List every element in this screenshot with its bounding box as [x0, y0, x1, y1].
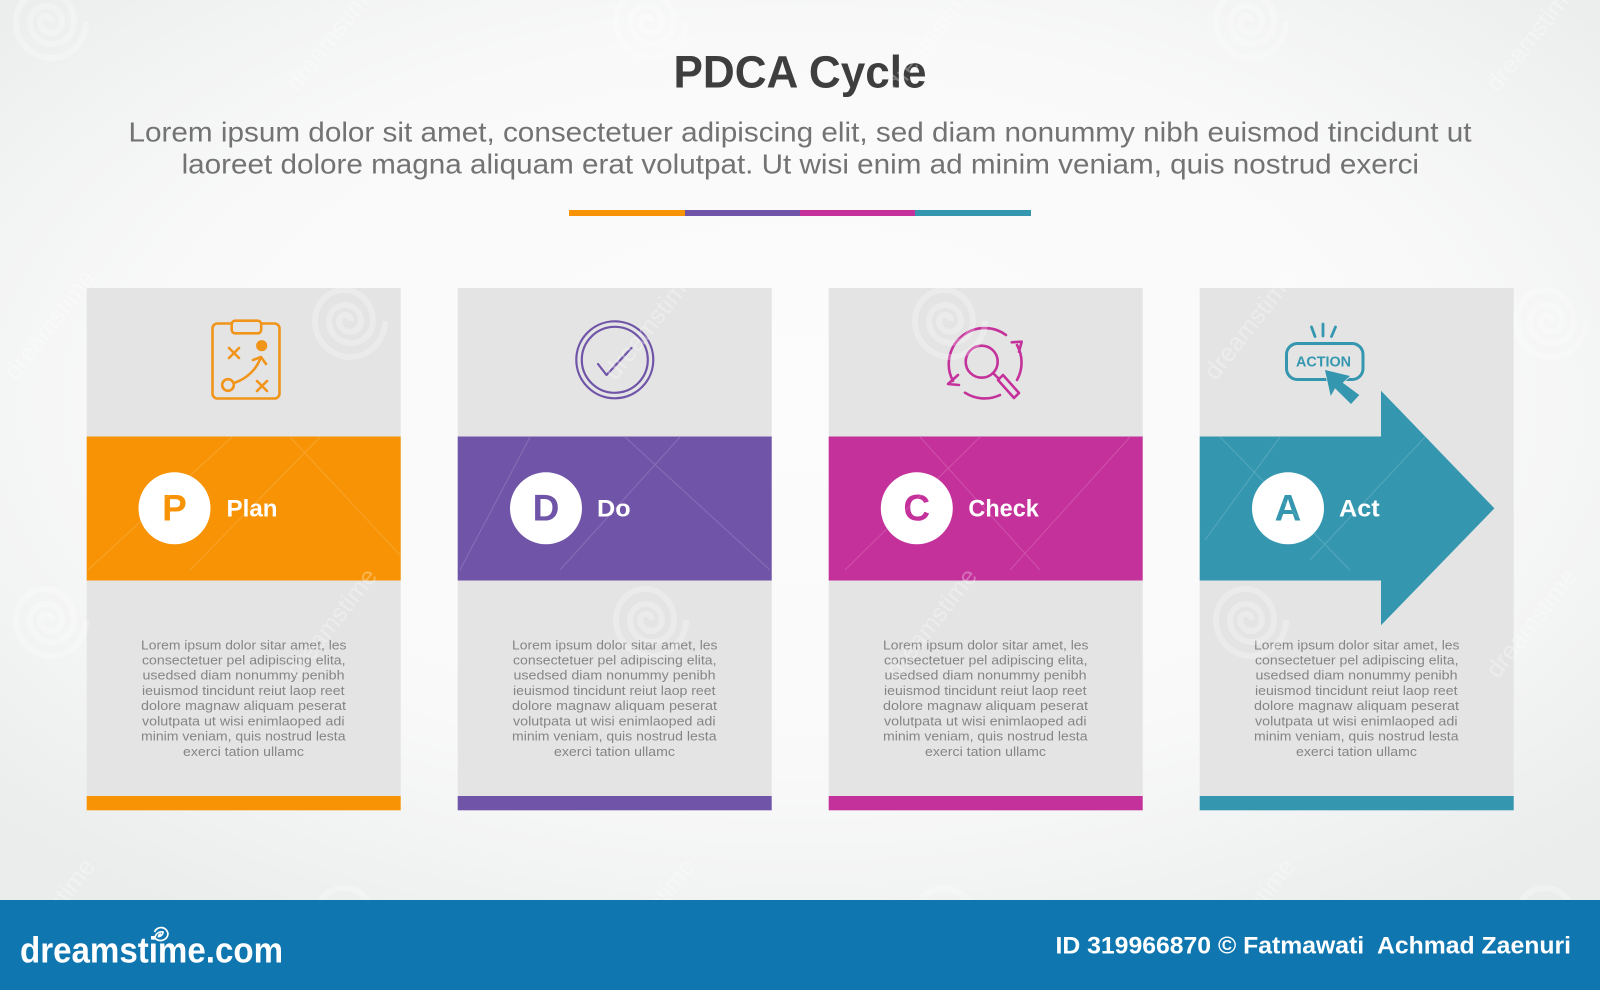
act description: ieuismod tincidunt reiut laop reet [1255, 683, 1458, 698]
plan footer bar [87, 796, 401, 810]
icon: magnifier with cycle arrows [948, 328, 1022, 398]
watermark overlay: dreamstime [598, 853, 701, 973]
check card background [829, 288, 1143, 796]
act footer bar [1200, 796, 1514, 810]
check footer bar [829, 796, 1143, 810]
act description: dolore magnaw aliquam peserat [1254, 698, 1459, 713]
act description: minim veniam, quis nostrud lesta [1254, 729, 1459, 744]
watermark overlay: dreamstime [1480, 563, 1583, 683]
watermark overlay: dreamstime [1198, 853, 1301, 973]
act description [1254, 637, 1460, 759]
panel: Do [458, 288, 772, 810]
plan badge: P [162, 488, 187, 529]
do card background [458, 288, 772, 796]
check description: ieuismod tincidunt reiut laop reet [884, 683, 1087, 698]
subtitle text: Lorem ipsum dolor sit amet, consectetuer adipiscing elit, sed diam nonummy nibh euismod tincidunt ut [128, 117, 1472, 148]
image credit: ID 319966870 © Fatmawati Achmad Zaenuri [1056, 932, 1571, 959]
plan description: minim veniam, quis nostrud lesta [141, 729, 346, 744]
watermark overlay: dreamstime [0, 265, 101, 385]
icon: action button with cursor: ACTION [1296, 355, 1351, 371]
act description: Lorem ipsum dolor sitar amet, les [1254, 637, 1460, 652]
plan description: ieuismod tincidunt reiut laop reet [142, 683, 345, 698]
act badge: A [1275, 488, 1301, 529]
do description: dolore magnaw aliquam peserat [512, 698, 717, 713]
plan description: exerci tation ullamc [183, 744, 305, 759]
do label: Do [597, 496, 631, 523]
plan description [141, 637, 346, 759]
subtitle text: laoreet dolore magna aliquam erat volutpat. Ut wisi enim ad minim veniam, quis nostrud exerci [182, 148, 1419, 179]
plan card background [87, 288, 401, 796]
subtitle text [128, 117, 1472, 179]
watermark overlay: dreamstime [598, 265, 701, 385]
check header band [829, 436, 1143, 580]
panel: Act [1200, 288, 1514, 810]
act badge [1252, 472, 1324, 544]
check label: Check [968, 496, 1039, 523]
plan description: usedsed diam nonummy penibh [142, 668, 344, 683]
check description [883, 637, 1088, 759]
check description: minim veniam, quis nostrud lesta [883, 729, 1088, 744]
plan description: dolore magnaw aliquam peserat [141, 698, 346, 713]
do description [512, 637, 718, 759]
panel: Plan [87, 288, 401, 810]
check description: volutpata ut wisi enimlaoped adi [884, 713, 1086, 728]
act description: consectetuer pel adipiscing elita, [1255, 652, 1458, 668]
icon: action button with cursor [1286, 324, 1363, 404]
do description: Lorem ipsum dolor sitar amet, les [512, 637, 718, 652]
act label: Act [1339, 496, 1380, 523]
do description: ieuismod tincidunt reiut laop reet [513, 683, 716, 698]
do description: minim veniam, quis nostrud lesta [512, 729, 717, 744]
panel: Check [829, 288, 1143, 810]
do footer bar [458, 796, 772, 810]
act card background [1200, 288, 1514, 796]
do description: consectetuer pel adipiscing elita, [513, 652, 716, 668]
plan label: Plan [226, 496, 278, 523]
do badge: D [533, 488, 559, 529]
check description: exerci tation ullamc [925, 744, 1047, 759]
watermark overlay: dreamstime [280, 563, 383, 683]
do description: volutpata ut wisi enimlaoped adi [513, 713, 716, 728]
check description: Lorem ipsum dolor sitar amet, les [883, 637, 1088, 652]
watermark overlay: dreamstime [1198, 265, 1301, 385]
do description: usedsed diam nonummy penibh [514, 668, 716, 683]
do header band [458, 436, 772, 580]
plan badge [138, 472, 210, 544]
act description: usedsed diam nonummy penibh [1256, 668, 1458, 683]
act description: volutpata ut wisi enimlaoped adi [1255, 713, 1458, 728]
plan header band [87, 436, 401, 580]
icon: clipboard strategy [212, 321, 280, 398]
do badge [510, 472, 582, 544]
dreamstime logo: dreamstime.com [20, 930, 283, 971]
check badge [881, 472, 953, 544]
icon: check mark in circle [576, 321, 653, 398]
check description: dolore magnaw aliquam peserat [883, 698, 1088, 713]
do description: exerci tation ullamc [554, 744, 676, 759]
check description: usedsed diam nonummy penibh [884, 668, 1086, 683]
footer bar [0, 900, 1600, 990]
plan description: consectetuer pel adipiscing elita, [142, 652, 346, 668]
title: PDCA Cycle [674, 46, 926, 98]
act description: exerci tation ullamc [1296, 744, 1418, 759]
watermark overlay: dreamstime [880, 563, 983, 683]
watermark overlay: dreamstime [0, 853, 101, 973]
plan description: Lorem ipsum dolor sitar amet, les [141, 637, 346, 652]
plan description: volutpata ut wisi enimlaoped adi [142, 713, 344, 728]
check description: consectetuer pel adipiscing elita, [884, 652, 1088, 668]
check badge: C [903, 488, 930, 529]
four-colour divider rule [569, 210, 1031, 216]
act header arrow [1200, 391, 1494, 625]
